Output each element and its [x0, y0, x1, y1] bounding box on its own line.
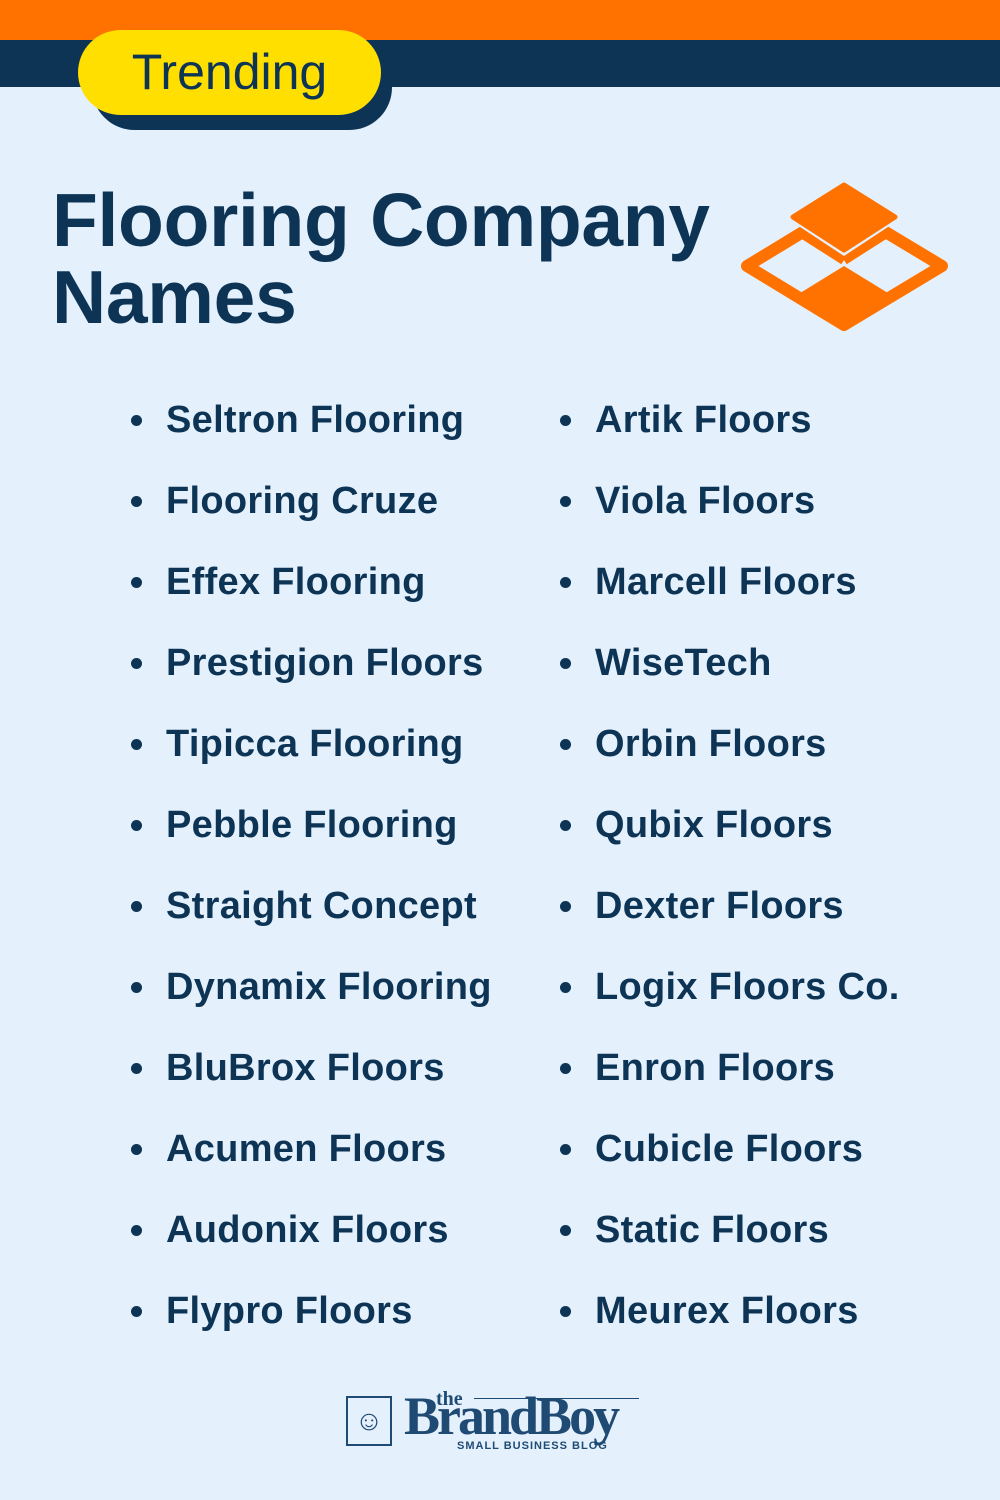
icon: boy face: [346, 1396, 392, 1446]
title: Names: [52, 255, 296, 339]
badge: Trending: Trending: [132, 44, 327, 100]
list: right column: Meurex Floors: [595, 1290, 859, 1332]
icon: boy face: ☺: [355, 1405, 383, 1436]
list: left column: Flypro Floors: [166, 1290, 413, 1332]
list: right column: Cubicle Floors: [595, 1128, 863, 1170]
badge: Trending: [78, 30, 392, 130]
list: right column: Viola Floors: [595, 480, 815, 522]
list: right column: WiseTech: [595, 642, 772, 684]
navy band: [0, 40, 1000, 87]
list: left column: Seltron Flooring: [166, 399, 464, 441]
list: left column: Audonix Floors: [166, 1209, 449, 1251]
list: right column: Marcell Floors: [595, 561, 857, 603]
icon: floor tiles: [741, 182, 948, 332]
list: right column: [560, 399, 900, 1332]
list: right column: Dexter Floors: [595, 885, 844, 927]
list: left column: Tipicca Flooring: [166, 723, 464, 765]
list: right column: Qubix Floors: [595, 804, 833, 846]
list: left column: Pebble Flooring: [166, 804, 458, 846]
list: left column: Acumen Floors: [166, 1128, 446, 1170]
title: Flooring Company: [52, 178, 710, 262]
list: left column: [131, 399, 492, 1332]
list: left column: Effex Flooring: [166, 561, 426, 603]
list: left column: Dynamix Flooring: [166, 966, 492, 1008]
logo: the BrandBoy: [346, 1386, 639, 1452]
logo: the BrandBoy: BrandBoy: [404, 1386, 617, 1446]
list: right column: Static Floors: [595, 1209, 829, 1251]
list: right column: Artik Floors: [595, 399, 812, 441]
logo: the BrandBoy: SMALL BUSINESS BLOG: [457, 1440, 608, 1452]
top orange bar: [0, 0, 1000, 40]
list: right column: Enron Floors: [595, 1047, 835, 1089]
list: right column: Logix Floors Co.: [595, 966, 900, 1008]
logo: the BrandBoy: the: [436, 1388, 463, 1410]
list: left column: Straight Concept: [166, 885, 477, 927]
list: left column: Flooring Cruze: [166, 480, 438, 522]
list: left column: Prestigion Floors: [166, 642, 484, 684]
list: left column: BluBrox Floors: [166, 1047, 445, 1089]
list: right column: Orbin Floors: [595, 723, 827, 765]
title: [52, 178, 710, 339]
